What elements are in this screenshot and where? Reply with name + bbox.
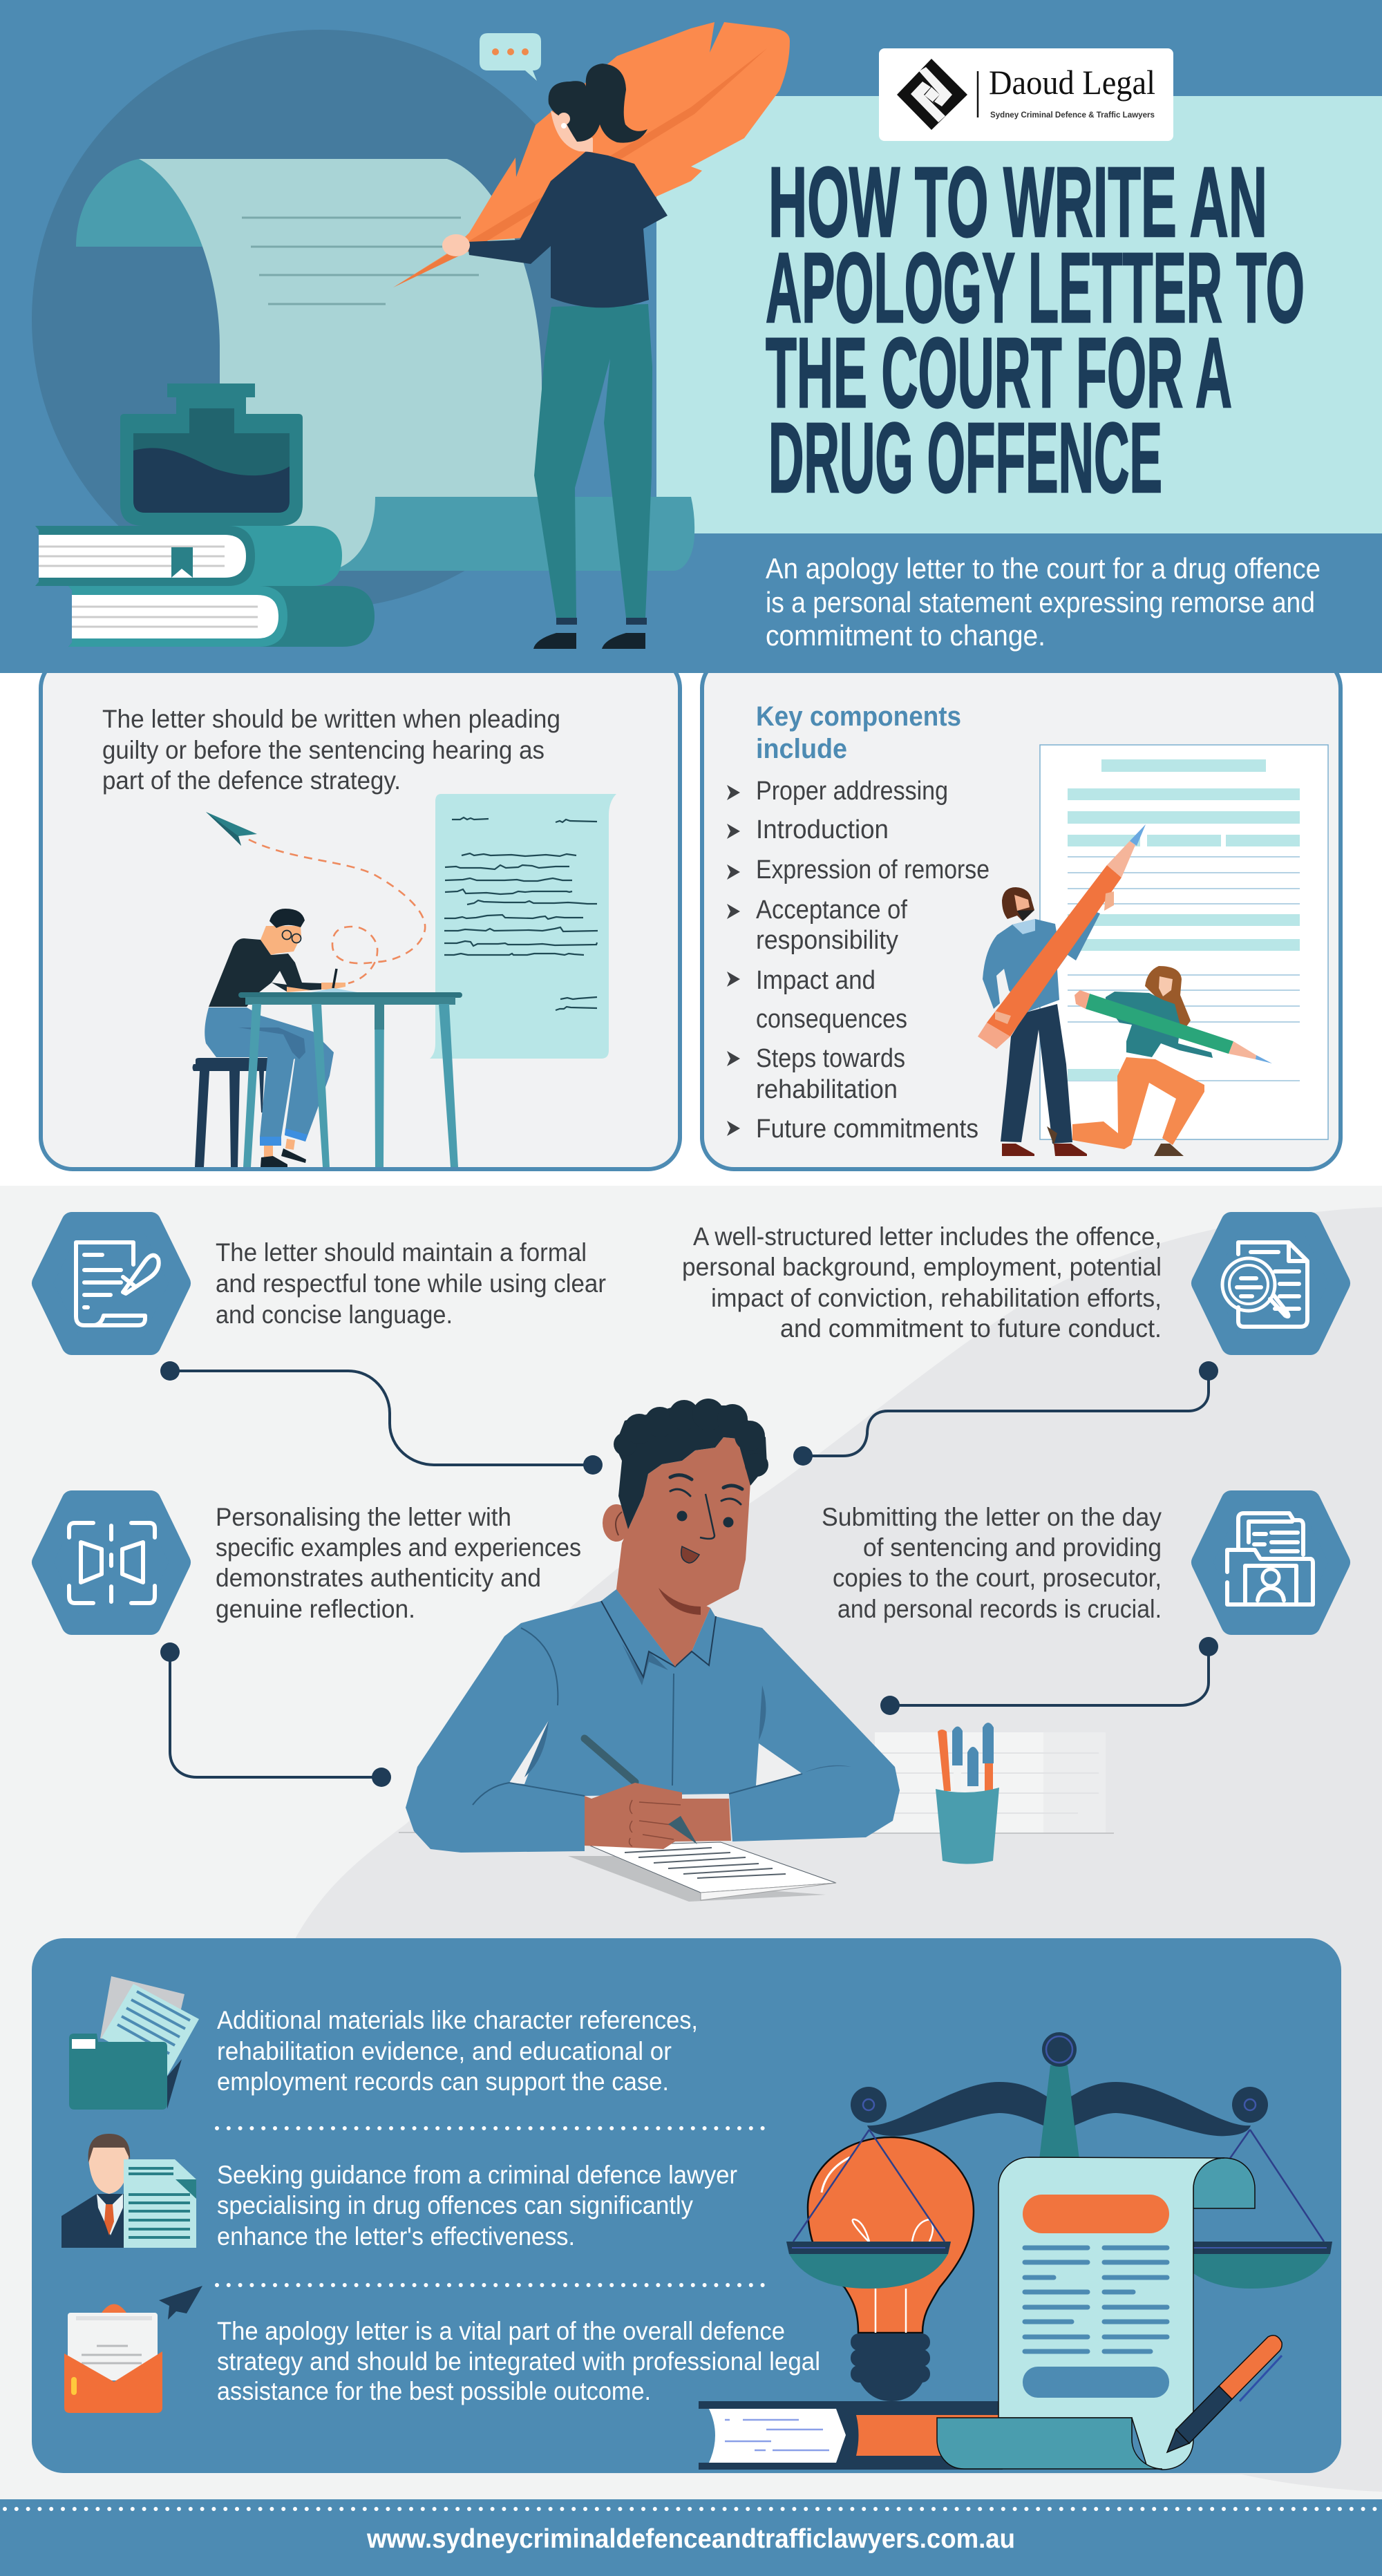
text: well-structured letter <box>682 1222 1162 1343</box>
illustration: light bulb <box>808 2137 974 2401</box>
illustration: paper scroll <box>76 159 694 571</box>
text: formal tone: and respectful tone while using clear <box>216 1269 606 1298</box>
list: key components: consequences <box>756 1005 907 1034</box>
text: when to write <box>102 705 560 795</box>
text: additional materials: employment records can support the case. <box>217 2067 669 2096</box>
background circle <box>32 30 611 609</box>
aqua title band <box>656 96 1382 533</box>
header <box>0 0 1382 673</box>
text: vital part of defence <box>217 2317 820 2405</box>
panel: supporting guidance <box>32 1938 1341 2473</box>
list: key components: Proper addressing <box>756 777 948 806</box>
heading: key components: include <box>756 734 847 764</box>
icon: folder of papers <box>69 1976 199 2110</box>
text: submitting the letter: and personal records is crucial. <box>837 1595 1162 1623</box>
connector: structure to man <box>793 1361 1218 1466</box>
heading: key components: Key components <box>756 701 961 732</box>
text: vital part of defence: The apology letter is a vital part of the overall defence <box>217 2317 785 2345</box>
illustration: large document <box>1040 745 1328 1139</box>
list: key components: Acceptance of <box>756 896 907 925</box>
section: main background <box>0 1186 1382 2499</box>
list: key components: Impact and <box>756 966 875 995</box>
icon: speech bubble <box>480 33 541 81</box>
text: personalising: demonstrates authenticity and <box>216 1564 541 1592</box>
connector: formal tone to man <box>160 1361 603 1475</box>
text: submitting the letter <box>822 1503 1162 1623</box>
logo: Daoud Legal: Daoud Legal <box>989 63 1155 102</box>
text: submitting the letter: of sentencing and providing <box>863 1533 1162 1562</box>
illustration: scales of justice <box>851 2032 1268 2159</box>
illustration: man holding big pencil <box>978 824 1146 1156</box>
text: personalising: specific examples and experiences <box>216 1533 581 1562</box>
icon: pen cup <box>936 1723 999 1864</box>
text: vital part of defence: assistance for the best possible outcome. <box>217 2377 651 2405</box>
icon: ink bottle <box>120 383 303 526</box>
list: key components: Steps towards <box>756 1044 905 1073</box>
logo: Daoud Legal: Sydney Criminal Defence & Traffic Lawyers <box>990 110 1155 120</box>
illustration: woman with quill <box>442 64 668 649</box>
intro text: An apology letter to the court for a drug offence <box>766 552 1321 585</box>
illustration: left scale pan <box>786 2130 951 2289</box>
list: key components: rehabilitation <box>756 1075 898 1104</box>
text: personalising: genuine reflection. <box>216 1595 415 1623</box>
text: submitting the letter: Submitting the letter on the day <box>822 1503 1162 1531</box>
dashed flight path <box>249 840 425 983</box>
text: seeking guidance: enhance the letter's effectiveness. <box>217 2222 575 2251</box>
icon: pen <box>1167 2336 1282 2452</box>
list: key components: Introduction <box>756 815 889 844</box>
icon: lawyer with document <box>61 2134 196 2248</box>
icon: envelope and paper plane <box>64 2286 202 2413</box>
text: seeking guidance: Seeking guidance from a criminal defence lawyer <box>217 2161 737 2189</box>
icon: hexagon document search <box>1202 1222 1340 1345</box>
illustration: handwritten document <box>430 794 616 1059</box>
icon: hexagon letter and quill <box>42 1222 180 1345</box>
icon: book stack <box>35 526 375 647</box>
text: formal tone: and concise language. <box>216 1300 453 1329</box>
text: when to write: guilty or before the sentencing hearing as <box>102 736 545 764</box>
text: vital part of defence: strategy and should be integrated with professional legal <box>217 2347 820 2376</box>
illustration: right scale pan <box>1193 2130 1332 2289</box>
illustration: background window <box>399 1732 1114 1833</box>
panel: when to write <box>41 656 680 1169</box>
illustration: book <box>699 2401 1003 2470</box>
panel: key components <box>702 656 1341 1169</box>
text: well-structured letter: A well-structured letter includes the offence, <box>693 1222 1162 1251</box>
list: key components: Expression of remorse <box>756 855 990 884</box>
intro text <box>766 552 1321 652</box>
text: personalising: Personalising the letter with <box>216 1503 511 1531</box>
icon: hexagon folder and profile <box>1202 1501 1340 1625</box>
text: well-structured letter: and commitment to future conduct. <box>780 1314 1162 1343</box>
list: key components: Future commitments <box>756 1115 978 1144</box>
text: additional materials <box>217 2006 698 2096</box>
list: key components: responsibility <box>756 926 898 955</box>
intro text: is a personal statement expressing remorse and <box>766 586 1315 618</box>
illustration: woman holding green pencil <box>1047 966 1272 1156</box>
illustration: man writing <box>406 1399 900 1902</box>
connector: personalising to man <box>160 1642 391 1787</box>
connector: submitting to desk <box>880 1637 1218 1715</box>
text: additional materials: Additional materials like character references, <box>217 2006 698 2034</box>
text: when to write: part of the defence strategy. <box>102 766 401 795</box>
text: seeking guidance <box>217 2161 737 2251</box>
illustration: quill feather <box>393 22 790 287</box>
title <box>766 146 1305 513</box>
illustration: man writing at desk <box>192 909 462 1167</box>
heading: key components <box>756 701 961 764</box>
text: seeking guidance: specialising in drug offences can significantly <box>217 2191 693 2219</box>
intro text: commitment to change. <box>766 619 1045 652</box>
text: formal tone: The letter should maintain a formal <box>216 1238 587 1267</box>
footer url: www.sydneycriminaldefenceandtrafficlawyers.com.au <box>366 2524 1015 2554</box>
text: submitting the letter: copies to the court, prosecutor, <box>833 1564 1162 1592</box>
logo: Daoud Legal <box>879 48 1173 141</box>
icon: hexagon reflection <box>42 1501 180 1625</box>
illustration: scroll document <box>937 2157 1255 2470</box>
text: well-structured letter: impact of conviction, rehabilitation efforts, <box>711 1284 1162 1312</box>
text: when to write: The letter should be written when pleading <box>102 705 560 733</box>
text: well-structured letter: personal background, employment, potential <box>682 1253 1162 1281</box>
text: additional materials: rehabilitation evidence, and educational or <box>217 2037 672 2065</box>
text: personalising <box>216 1503 581 1623</box>
footer <box>0 2499 1382 2576</box>
text: formal tone <box>216 1238 606 1329</box>
list: key components <box>727 777 990 1144</box>
icon: paper plane <box>206 812 257 846</box>
